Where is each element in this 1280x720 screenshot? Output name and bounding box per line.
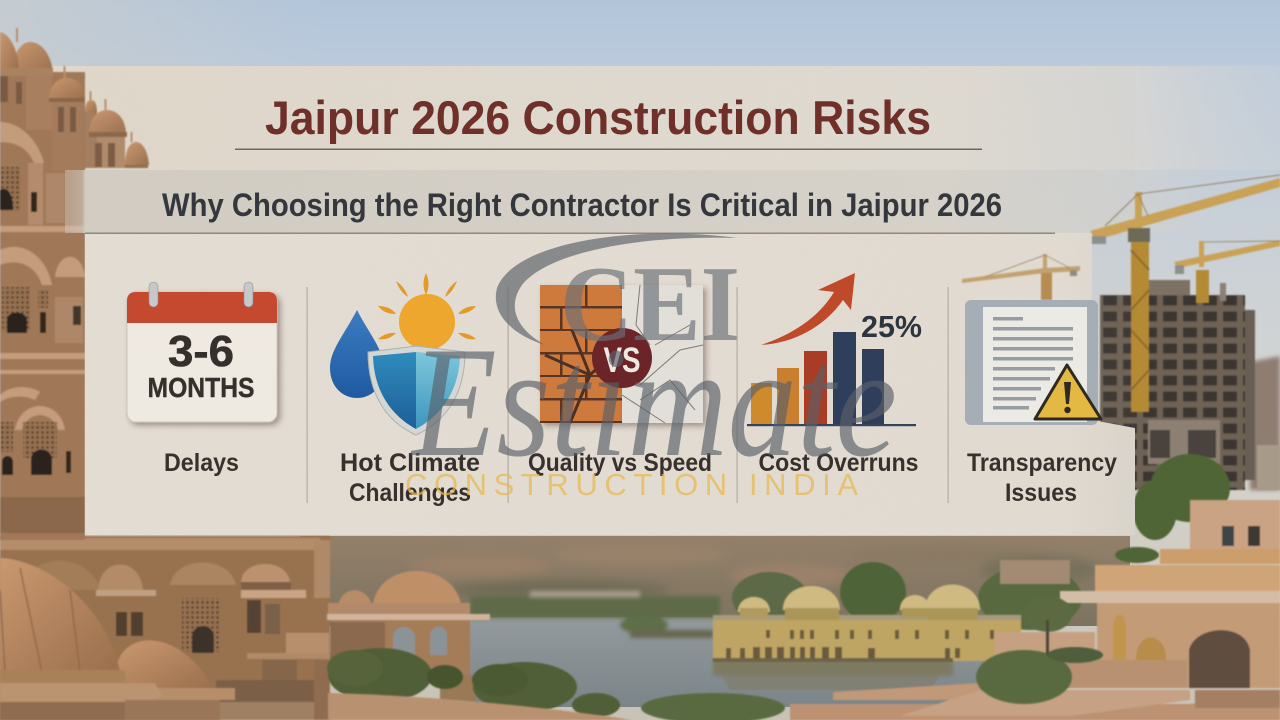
icon: calendar 3-6 months	[127, 282, 277, 422]
label: hot climate challenges: Hot Climate	[340, 449, 480, 477]
title underline	[235, 148, 982, 150]
background: small crane over panel	[962, 254, 1080, 300]
watermark construction india: CONSTRUCTION INDIA	[405, 467, 858, 502]
background: tree foreground	[976, 596, 1103, 704]
icon: calendar 3-6 months: MONTHS	[148, 372, 254, 403]
background: pale clouds top left	[0, 0, 320, 120]
column dividers	[306, 287, 949, 503]
subtitle: Why Choosing the Right Contractor Is Critical in Jaipur 2026	[162, 187, 1002, 223]
label: cost overruns: Cost Overruns	[758, 449, 918, 477]
subtitle underline	[85, 232, 1055, 234]
icon: cracked brick versus concrete: VS	[604, 341, 640, 380]
background: pavilion	[327, 571, 490, 703]
label: delays: Delays	[164, 449, 239, 477]
background: right tower crane	[1174, 240, 1280, 303]
icon: document with warning triangle	[965, 300, 1101, 425]
bar chart with rising arrow	[747, 273, 922, 426]
label: transparency issues: Transparency	[967, 449, 1117, 477]
value: 25%: 25%	[861, 309, 922, 344]
paper grain texture	[85, 66, 1135, 536]
background: Jal Mahal palace	[713, 562, 1082, 690]
background: lower palace wall	[0, 536, 347, 720]
background: right terrace building	[995, 500, 1280, 688]
risk 5: transparency	[965, 300, 1117, 507]
background: terrace wall left	[328, 693, 632, 720]
label: quality vs speed: Quality vs Speed	[528, 449, 712, 477]
watermark: CEI Estimate Construction India	[405, 234, 897, 502]
background: high-rise under construction	[1100, 280, 1280, 490]
risk 2: hot climate	[330, 273, 480, 507]
risk 4: cost overruns	[747, 273, 922, 477]
arrow: rising cost	[761, 273, 855, 345]
icon: sun, water drop and shield	[330, 273, 476, 435]
background: hills	[300, 536, 1130, 626]
panel: title banner	[40, 66, 1280, 170]
panel: subtitle banner	[65, 170, 1280, 233]
icon: calendar 3-6 months: 3-6	[168, 327, 234, 376]
panel: risk cards	[85, 233, 1135, 535]
risk 3: quality vs speed	[528, 285, 712, 477]
background: far hill right	[1250, 356, 1280, 490]
background: trees right	[1115, 454, 1230, 563]
background: foreground terraces	[790, 683, 1280, 720]
background: far shore	[470, 591, 953, 676]
background: big domes bottom left	[0, 558, 235, 720]
watermark swoosh	[496, 234, 737, 345]
label line two: Issues	[1005, 479, 1077, 507]
watermark Estimate: Estimate	[410, 315, 897, 490]
risk 1: delays	[127, 282, 277, 477]
background: Hawa Mahal facade	[0, 28, 149, 540]
background: main tower crane	[1090, 175, 1280, 412]
icon: cracked brick versus concrete	[540, 285, 703, 423]
watermark CEI: CEI	[560, 245, 740, 364]
background: trees left	[327, 648, 785, 720]
background: lake	[465, 617, 985, 707]
title: Jaipur 2026 Construction Risks	[265, 91, 931, 144]
label line two: Challenges	[349, 479, 471, 507]
